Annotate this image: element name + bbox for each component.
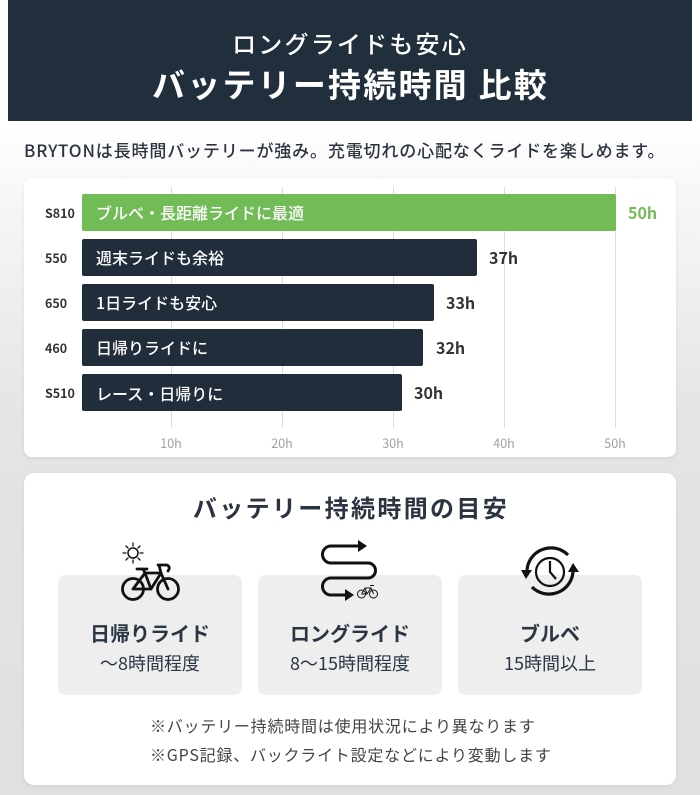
bar: 650: 1日ライドも安心 (96, 290, 217, 314)
card: brevet: ブルベ (520, 618, 580, 647)
axis tick 10h: 10h (160, 433, 182, 452)
guide heading: バッテリー持続時間の目安 (193, 489, 509, 524)
title banner (8, 0, 692, 121)
bar: S510: レース・日帰りに (96, 381, 223, 405)
label: S510: S510 (45, 383, 75, 402)
label: 650: 650 (45, 293, 67, 312)
bar: S810 (82, 194, 616, 231)
value: 37h: 37h (489, 245, 518, 269)
bar: 650 (82, 284, 434, 321)
axis tick 20h: 20h (271, 433, 293, 452)
label: 550: 550 (45, 248, 67, 267)
value: 33h: 33h (446, 290, 475, 314)
icon: sun and bicycle (121, 542, 180, 601)
label: 460: 460 (45, 338, 67, 357)
axis tick 30h: 30h (382, 433, 404, 452)
title: first line: ロングライドも安心 (232, 25, 468, 60)
bar: 460: 日帰りライドに (96, 335, 208, 359)
value: 30h: 30h (414, 380, 443, 404)
panel: battery chart (24, 187, 676, 458)
title: second line: バッテリー持続時間 比較 (152, 59, 549, 107)
bar: 550 (82, 239, 477, 276)
value: 32h: 32h (436, 335, 465, 359)
icon: clock with circular arrows (521, 546, 579, 596)
bar: S810: ブルベ・長距離ライドに最適 (96, 200, 304, 224)
card: brevet: 15時間以上 (504, 650, 596, 676)
card: day ride (58, 575, 242, 695)
card: long ride: ロングライド (290, 618, 410, 647)
card: long ride (258, 575, 442, 695)
card: long ride: 8〜15時間程度 (290, 650, 410, 676)
note: second line: ※GPS記録、バックライト設定などにより変動します (150, 742, 552, 766)
axis tick 50h: 50h (604, 433, 626, 452)
note: first line: ※バッテリー持続時間は使用状況により異なります (150, 713, 536, 737)
axis tick 40h: 40h (493, 433, 515, 452)
panel: battery guide (24, 473, 676, 785)
bar: 460 (82, 329, 423, 366)
bar: S510 (82, 374, 402, 411)
bar: 550: 週末ライドも余裕 (96, 245, 224, 269)
card: brevet (458, 575, 642, 695)
icon: winding route with bicycle (321, 540, 378, 601)
card: day ride: 日帰りライド (90, 618, 210, 647)
chart card background (24, 178, 676, 457)
card: day ride: 〜8時間程度 (100, 650, 200, 676)
value: 50h: 50h (628, 200, 657, 224)
label: S810: S810 (45, 203, 75, 222)
intro text: BRYTONは長時間バッテリーが強み。充電切れの心配なくライドを楽しめます。 (24, 137, 665, 162)
